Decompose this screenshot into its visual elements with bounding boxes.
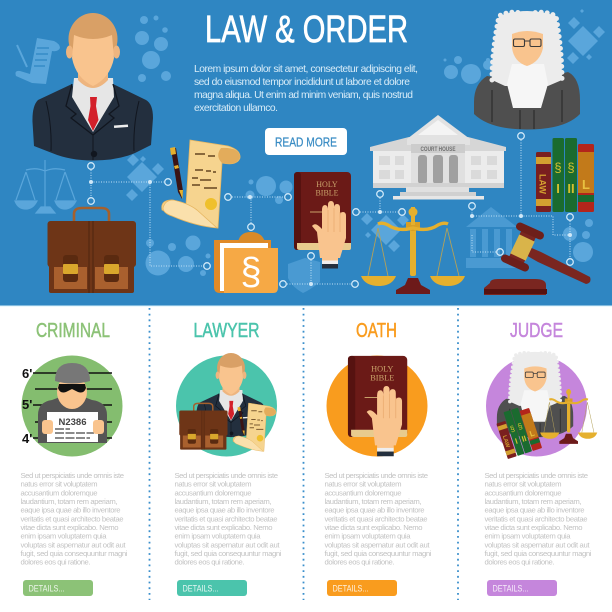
icon: criminal mugshot: 5' <box>22 397 32 412</box>
details button: DETAILS... <box>332 584 368 594</box>
details button <box>23 580 93 596</box>
icon: judge with books and scales: LAW <box>501 435 511 449</box>
icon: scroll and fountain pen <box>162 140 240 228</box>
icon: lawyer bust <box>32 13 153 160</box>
icon: law books: § <box>567 160 575 175</box>
description text: fugit, sed quia consequuntur magni <box>484 549 592 558</box>
icon: folder with paragraph sign: § <box>240 251 262 293</box>
description text: natus error sit voluptatem <box>20 480 98 489</box>
description text: enim ipsam voluptatem quia <box>324 532 411 541</box>
icon: law books: L <box>582 177 590 192</box>
description text: eaque ipsa quae ab illo inventore <box>20 506 120 515</box>
description text: fugit, sed quia consequuntur magni <box>20 549 128 558</box>
read more button <box>265 128 347 155</box>
icon: judge with books and scales: II <box>521 434 528 444</box>
read more button: READ MORE <box>275 136 337 150</box>
decorative circles and diamonds <box>126 9 605 276</box>
description text: laudantium, totam rem aperiam, <box>20 497 118 506</box>
intro paragraph <box>194 64 418 114</box>
icon: law books <box>536 138 594 212</box>
description text: voluptas sit aspernatur aut odit aut <box>20 540 126 549</box>
icon: bible with hand: BIBLE <box>315 188 339 198</box>
description text: veritatis et quasi architecto beatae <box>484 514 588 523</box>
icon: judge with books and scales: L <box>528 429 536 439</box>
icon: bible with hand: HOLY <box>316 180 338 189</box>
icon: judge bust <box>474 11 580 130</box>
icon: gavel <box>484 226 590 295</box>
faint icon: scales <box>15 160 76 213</box>
icon: bible oath: HOLY <box>371 364 393 373</box>
description text <box>20 471 128 567</box>
description text: Sed ut perspiciatis unde omnis iste <box>324 471 428 480</box>
details button <box>487 580 557 596</box>
description text: enim ipsam voluptatem quia <box>484 532 571 541</box>
intro paragraph: exercitation ullamco. <box>194 103 278 114</box>
description text: vitae dicta sunt explicabo. Nemo <box>324 523 422 532</box>
column dividers <box>150 308 458 600</box>
description text: Sed ut perspiciatis unde omnis iste <box>484 471 588 480</box>
heading: judge: JUDGE <box>510 319 563 342</box>
icon: law books: LAW <box>538 174 548 195</box>
faint icon: scroll <box>16 38 60 84</box>
connector network <box>88 133 573 287</box>
panel: lawyer <box>174 319 282 596</box>
icon: folder with paragraph sign <box>214 232 278 293</box>
description text <box>324 471 432 567</box>
icon: golden scales <box>361 207 465 294</box>
icon: criminal mugshot: N2386 <box>58 417 86 428</box>
description text <box>484 471 592 567</box>
heading: oath: OATH <box>356 319 397 342</box>
description text: dolores eos qui ratione. <box>174 558 244 567</box>
description text: dolores eos qui ratione. <box>484 558 554 567</box>
icon: judge with books and scales: § <box>509 424 516 434</box>
description text: vitae dicta sunt explicabo. Nemo <box>484 523 582 532</box>
panel: judge <box>484 319 597 596</box>
heading: criminal: CRIMINAL <box>36 319 110 342</box>
title: LAW & ORDER <box>205 9 408 51</box>
icon: law books: I <box>556 181 560 196</box>
description text: veritatis et quasi architecto beatae <box>174 514 278 523</box>
description text: dolores eos qui ratione. <box>324 558 394 567</box>
description text <box>174 471 282 567</box>
intro paragraph: magna aliqua. Ut enim ad minim veniam, quis nostrud <box>194 90 413 101</box>
description text: natus error sit voluptatem <box>484 480 562 489</box>
description text: voluptas sit aspernatur aut odit aut <box>324 540 430 549</box>
description text: natus error sit voluptatem <box>324 480 402 489</box>
icon: courthouse <box>370 115 506 200</box>
description text: accusantium doloremque <box>20 488 98 497</box>
icon: law books: II <box>567 181 575 196</box>
details button: DETAILS... <box>492 584 528 594</box>
description text: enim ipsam voluptatem quia <box>174 532 261 541</box>
description text: vitae dicta sunt explicabo. Nemo <box>20 523 119 532</box>
description text: veritatis et quasi architecto beatae <box>324 514 428 523</box>
icon: judge with books and scales <box>486 352 597 459</box>
icon: law books: § <box>554 160 562 175</box>
icon: courthouse: COURT HOUSE <box>420 147 456 153</box>
icon: criminal mugshot: 6' <box>22 366 32 381</box>
faint icon: temple <box>466 207 518 268</box>
description text: voluptas sit aspernatur aut odit aut <box>484 540 590 549</box>
icon: bible oath <box>326 356 428 456</box>
details button <box>177 580 247 596</box>
icon: lawyer with briefcase and scroll <box>176 353 277 456</box>
icon: bible with hand <box>294 172 351 268</box>
icon: criminal mugshot <box>22 356 122 456</box>
description text: accusantium doloremque <box>324 488 402 497</box>
description text: laudantium, totam rem aperiam, <box>324 497 422 506</box>
heading: lawyer: LAWYER <box>194 319 260 342</box>
description text: accusantium doloremque <box>174 488 252 497</box>
description text: eaque ipsa quae ab illo inventore <box>484 506 584 515</box>
faint icon: shield <box>288 258 320 293</box>
description text: eaque ipsa quae ab illo inventore <box>324 506 424 515</box>
description text: veritatis et quasi architecto beatae <box>20 514 124 523</box>
description text: dolores eos qui ratione. <box>20 558 90 567</box>
description text: laudantium, totam rem aperiam, <box>484 497 582 506</box>
details button: DETAILS... <box>182 584 218 594</box>
details button <box>327 580 397 596</box>
icon: criminal mugshot: 4' <box>22 431 32 446</box>
description text: fugit, sed quia consequuntur magni <box>174 549 282 558</box>
icon: judge with books and scales: I <box>514 437 519 446</box>
description text: natus error sit voluptatem <box>174 480 252 489</box>
description text: voluptas sit aspernatur aut odit aut <box>174 540 280 549</box>
description text: Sed ut perspiciatis unde omnis iste <box>174 471 278 480</box>
icon: briefcase <box>48 208 136 293</box>
description text: vitae dicta sunt explicabo. Nemo <box>174 523 272 532</box>
description text: Sed ut perspiciatis unde omnis iste <box>20 471 124 480</box>
description text: accusantium doloremque <box>484 488 562 497</box>
details button: DETAILS... <box>28 584 64 594</box>
intro paragraph: sed do eiusmod tempor incididunt ut labore et dolore <box>194 77 410 88</box>
description text: laudantium, totam rem aperiam, <box>174 497 272 506</box>
panel divider line <box>0 306 612 307</box>
icon: judge with books and scales: § <box>517 421 524 431</box>
panel: oath <box>324 319 432 596</box>
description text: eaque ipsa quae ab illo inventore <box>174 506 274 515</box>
panel: criminal <box>20 319 128 596</box>
icon: bible oath: BIBLE <box>370 373 394 382</box>
banner panel <box>0 0 612 306</box>
intro paragraph: Lorem ipsum dolor sit amet, consectetur adipiscing elit, <box>194 64 418 75</box>
description text: enim ipsam voluptatem quia <box>20 532 107 541</box>
description text: fugit, sed quia consequuntur magni <box>324 549 432 558</box>
